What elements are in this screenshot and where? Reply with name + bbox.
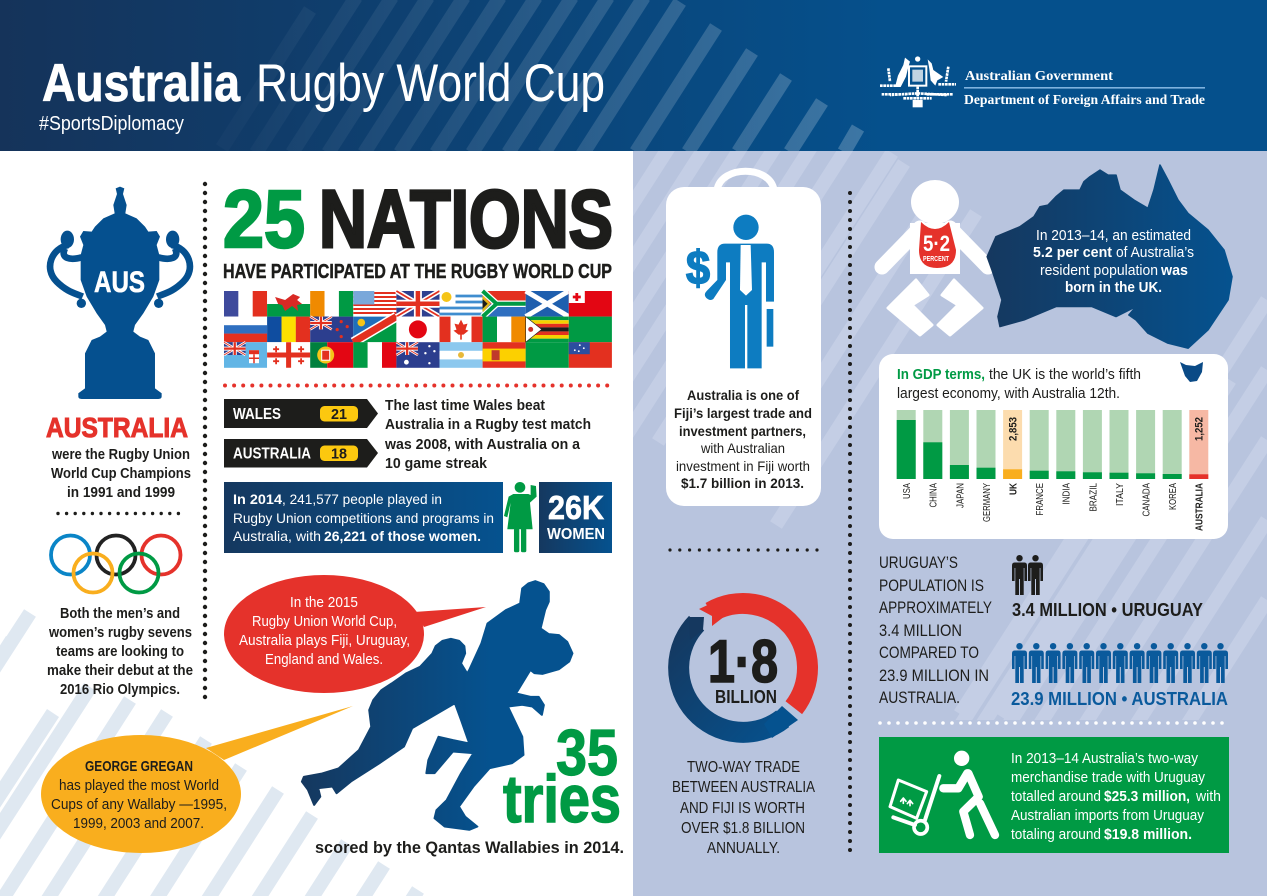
bar country labels — [901, 483, 1206, 531]
bar country labels: JAPAN — [954, 483, 966, 508]
bar country labels: CANADA — [1140, 483, 1152, 516]
scoreboard: Australia — [224, 439, 378, 468]
bar country labels: BRAZIL — [1087, 483, 1099, 512]
UK-born population text — [1033, 227, 1194, 296]
icon: olympic rings — [51, 536, 180, 592]
bar country labels: USA — [901, 483, 913, 499]
35 tries stat: scored by the Qantas Wallabies in 2014. — [315, 838, 624, 857]
bars — [897, 410, 1208, 479]
Uruguay population text — [879, 554, 992, 707]
Uruguay population text: URUGUAY’S — [879, 554, 958, 572]
olympics text — [47, 605, 193, 698]
Uruguay population text: AUSTRALIA. — [879, 689, 960, 707]
icon: baby with 5.2 percent bib — [882, 180, 988, 335]
bar value labels: 2,853 — [1008, 417, 1020, 441]
merchandise trade text: totalled around — [1011, 789, 1101, 805]
Australia population label: 23.9 MILLION • AUSTRALIA — [1011, 688, 1228, 709]
icon: dollar sign: $ — [686, 241, 710, 294]
bar country labels: CHINA — [928, 483, 940, 508]
callout: George Gregan: GEORGE GREGAN — [85, 758, 193, 775]
scoreboard: Wales: WALES — [233, 406, 281, 423]
icon: person with hand truck — [890, 751, 995, 835]
chart: circular trade arrows — [679, 597, 807, 738]
bar country labels: UK — [1008, 483, 1020, 495]
callout: 2015 world cup: England and Wales. — [265, 651, 383, 668]
callout: 2015 world cup — [224, 575, 486, 693]
icon: baby with 5.2 percent bib: 5·2 — [923, 231, 950, 256]
flags grid — [224, 291, 612, 368]
26K women stat: 26K — [548, 489, 604, 526]
trophy label: AUS — [94, 266, 145, 299]
panel: Fiji investment card — [666, 171, 821, 506]
26K women stat — [539, 482, 612, 553]
title: Australia — [42, 54, 240, 113]
Uruguay population text: POPULATION IS — [879, 577, 984, 595]
callout: George Gregan: 1999, 2003 and 2007. — [73, 815, 204, 832]
Uruguay population label: 3.4 MILLION • URUGUAY — [1012, 599, 1204, 620]
callout: 2015 world cup: In the 2015 — [290, 594, 358, 611]
bar country labels: AUSTRALIA — [1194, 483, 1206, 531]
icon: Australia population figures — [1012, 643, 1228, 683]
callout: George Gregan: Cups of any Wallaby —1995, — [51, 796, 227, 813]
Wales test match text: The last time Wales beat — [385, 397, 545, 414]
rugby players silhouette — [302, 581, 572, 830]
investment text: with Australian — [700, 440, 785, 456]
government wordmark — [964, 69, 1205, 108]
icon: coat of arms — [880, 56, 956, 107]
icon: woman — [504, 482, 537, 552]
investment text: investment partners, — [679, 423, 806, 439]
merchandise trade text: In 2013–14 Australia’s two-way — [1011, 751, 1199, 767]
two-way trade text — [672, 759, 815, 857]
olympics text: 2016 Rio Olympics. — [60, 681, 180, 698]
UK-born population text: 5.2 per cent — [1033, 244, 1112, 261]
GDP heading — [897, 367, 1141, 402]
title — [42, 54, 605, 113]
investment text: Australia is one of — [687, 387, 799, 403]
merchandise trade text: $25.3 million, — [1104, 789, 1190, 805]
scoreboard: Wales: 21 — [331, 406, 347, 423]
government wordmark: Australian Government — [965, 69, 1113, 84]
UK-born population text: resident population — [1040, 262, 1158, 279]
map of Australia — [987, 165, 1232, 348]
merchandise trade text: with — [1195, 789, 1221, 805]
left panel background — [0, 151, 633, 896]
two-way trade text: AND FIJI IS WORTH — [680, 800, 805, 817]
icon: baby with 5.2 percent bib: PERCENT — [923, 254, 949, 263]
merchandise trade text — [1011, 751, 1221, 843]
icon: rugby world cup trophy — [50, 187, 190, 399]
icon: businessman — [705, 215, 774, 368]
investment text — [674, 387, 812, 491]
callout: 2015 world cup: Australia plays Fiji, Uruguay, — [239, 632, 410, 649]
Uruguay population text: APPROXIMATELY — [879, 599, 992, 617]
two-way trade text: ANNUALLY. — [707, 840, 780, 857]
UK-born population text: of Australia’s — [1116, 244, 1194, 261]
bar value labels: 1,252 — [1194, 417, 1206, 441]
Uruguay population text: 3.4 MILLION — [879, 622, 962, 640]
Wales test match text: Australia in a Rugby test match — [385, 416, 591, 433]
olympics text: women’s rugby sevens — [48, 624, 192, 641]
olympics text: teams are looking to — [56, 643, 184, 660]
GDP heading: largest economy, with Australia 12th. — [897, 386, 1120, 402]
right panel background — [633, 151, 1267, 896]
title: Rugby World Cup — [256, 54, 605, 113]
Australia champions text: AUSTRALIA — [46, 412, 188, 443]
callout: George Gregan: has played the most World — [59, 777, 219, 794]
GDP heading: In GDP terms, — [897, 367, 985, 383]
Australia champions text: were the Rugby Union — [51, 447, 190, 463]
merchandise trade text: Australian imports from Uruguay — [1011, 808, 1205, 824]
Australia champions text: World Cup Champions — [51, 466, 191, 482]
UK-born population text: was — [1160, 262, 1188, 279]
bar country labels: INDIA — [1061, 483, 1073, 504]
UK-born population text: In 2013–14, an estimated — [1036, 227, 1191, 244]
chart: circular trade arrows: 1·8 — [708, 628, 778, 695]
women participation panel — [224, 482, 503, 553]
Australia champions text — [46, 412, 191, 501]
GDP heading: the UK is the world’s fifth — [989, 367, 1141, 383]
merchandise trade text: $19.8 million. — [1104, 827, 1192, 843]
26K women stat: WOMEN — [547, 526, 605, 543]
women participation panel: In 2014 — [233, 491, 282, 507]
government wordmark: Department of Foreign Affairs and Trade — [964, 93, 1205, 108]
icon: Uruguay population figures — [1012, 555, 1043, 595]
two-way trade text: OVER $1.8 BILLION — [681, 820, 805, 837]
women participation panel: 26,221 of those women. — [324, 528, 481, 544]
scoreboard: Australia: 18 — [331, 446, 347, 462]
women participation panel: Rugby Union competitions and programs in — [233, 510, 494, 526]
header band — [0, 0, 1267, 158]
callout: 2015 world cup: Rugby Union World Cup, — [252, 613, 397, 630]
panel: GDP bar chart — [879, 354, 1228, 539]
bar country labels: ITALY — [1114, 483, 1126, 506]
merchandise trade text: merchandise trade with Uruguay — [1011, 770, 1206, 786]
chart: circular trade arrows: BILLION — [715, 687, 777, 707]
investment text: $1.7 billion in 2013. — [681, 475, 804, 491]
two-way trade text: BETWEEN AUSTRALIA — [672, 779, 815, 796]
25 nations heading — [223, 174, 613, 283]
olympics text: make their debut at the — [47, 662, 193, 679]
Wales test match text — [384, 397, 591, 472]
Wales test match text: was 2008, with Australia on a — [384, 436, 581, 453]
Uruguay population text: 23.9 MILLION IN — [879, 667, 989, 685]
UK-born population text: born in the UK. — [1065, 279, 1162, 296]
merchandise trade text: totaling around — [1011, 827, 1101, 843]
callout: George Gregan — [41, 706, 353, 853]
hashtag: #SportsDiplomacy — [39, 113, 184, 135]
25 nations heading: HAVE PARTICIPATED AT THE RUGBY WORLD CUP — [223, 260, 612, 283]
olympics text: Both the men’s and — [60, 605, 180, 622]
25 nations heading: 25 — [223, 174, 305, 265]
35 tries stat: tries — [503, 762, 621, 837]
two-way trade text: TWO-WAY TRADE — [687, 759, 800, 776]
35 tries stat: 35 — [556, 716, 618, 789]
Australia champions text: in 1991 and 1999 — [67, 485, 175, 501]
35 tries stat — [315, 716, 624, 857]
bar country labels: GERMANY — [981, 483, 993, 522]
bar value labels — [1008, 417, 1206, 441]
investment text: Fiji’s largest trade and — [674, 405, 812, 421]
panel: merchandise trade — [879, 737, 1229, 853]
investment text: investment in Fiji worth — [676, 458, 810, 474]
bar country labels: FRANCE — [1034, 483, 1046, 516]
scoreboard: Wales — [224, 399, 378, 428]
scoreboard: Australia: AUSTRALIA — [233, 446, 311, 462]
women participation panel: , 241,577 people played in — [282, 491, 442, 507]
25 nations heading: NATIONS — [319, 174, 613, 265]
women participation panel: Australia, with — [233, 528, 321, 544]
Wales test match text: 10 game streak — [385, 455, 488, 472]
Uruguay population text: COMPARED TO — [879, 644, 979, 662]
bar country labels: KOREA — [1167, 483, 1179, 510]
icon: Tasmania — [1180, 362, 1203, 382]
